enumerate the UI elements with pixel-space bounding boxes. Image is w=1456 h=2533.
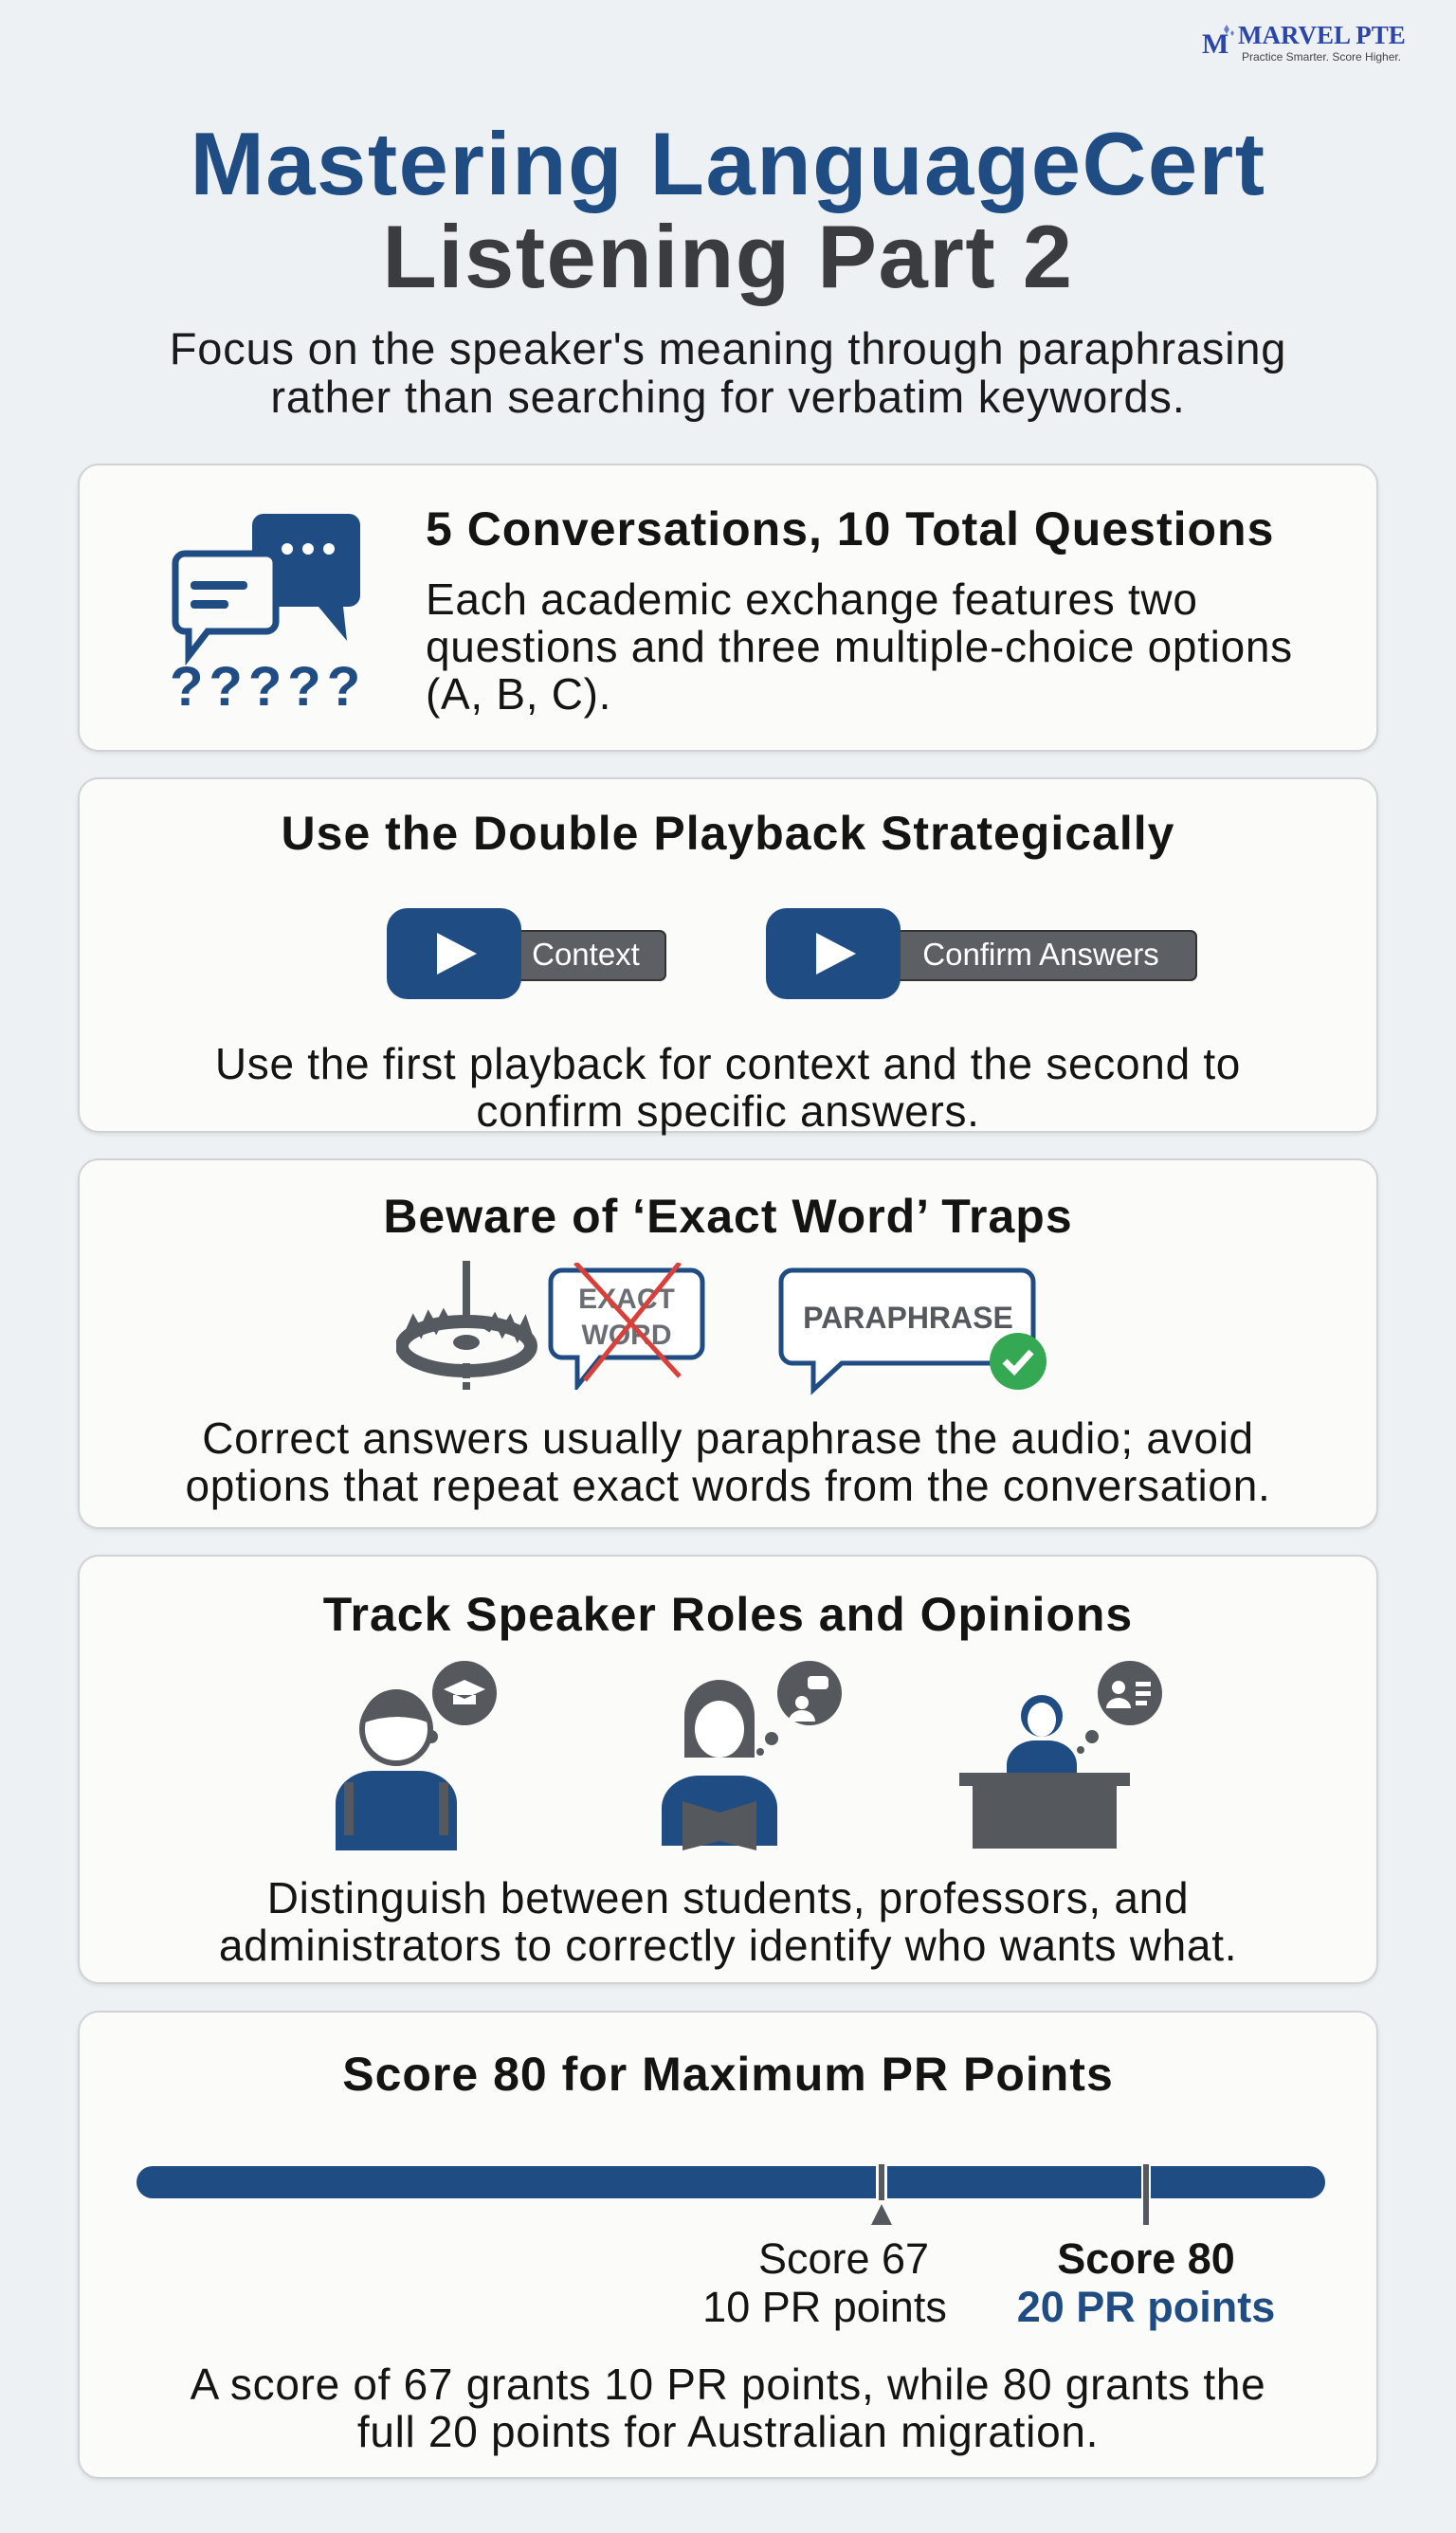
subtitle: Focus on the speaker's meaning through paraphrasing [170,323,1286,374]
panel: score 80 [78,2011,1378,2479]
icon: bear trap [396,1261,537,1390]
icon: paraphrase bubble: PARAPHRASE [803,1301,1013,1335]
icon: exact word crossed: WORD [582,1320,671,1351]
title [190,114,1266,306]
text block: questions and three multiple-choice options [426,622,1293,671]
text block [219,1873,1237,1970]
label: score 67: Score 67 [758,2234,929,2283]
heading: Beware of ‘Exact Word’ Traps [383,1190,1073,1243]
icon: paraphrase bubble [779,1268,1046,1395]
icon: exact word crossed: EXACT [578,1284,675,1315]
label: score 67 [702,2234,947,2331]
heading: 5 Conversations, 10 Total Questions [426,502,1274,556]
text block [215,1039,1241,1136]
icon: chat bubbles [170,514,366,715]
icon: student [336,1661,497,1850]
logo: MARVEL PTE [1238,21,1406,49]
text block: A score of 67 grants 10 PR points, while 80 grants the [191,2360,1265,2409]
text block: Use the first playback for context and the second to [215,1039,1241,1088]
heading: Use the Double Playback Strategically [282,807,1174,860]
icon: play confirm: Confirm Answers [922,937,1159,972]
icon: professor [662,1661,842,1850]
text block: Each academic exchange features two [426,574,1198,624]
icon: play context [387,908,666,999]
heading: Track Speaker Roles and Opinions [323,1588,1133,1641]
bar chart [136,2164,1325,2225]
text block [186,1413,1270,1510]
subtitle: rather than searching for verbatim keywords. [270,372,1186,422]
panel: exact word traps [78,1158,1378,1529]
panel: speaker roles [78,1555,1378,1984]
icon: play confirm [766,908,1197,999]
text block: Correct answers usually paraphrase the audio; avoid [202,1413,1254,1463]
title: Listening Part 2 [382,207,1074,306]
icon: play context: Context [532,937,640,972]
text block: administrators to correctly identify who wants what. [219,1921,1237,1970]
label: score 80: Score 80 [1057,2234,1235,2283]
icon: exact word crossed [548,1263,705,1390]
text block [426,574,1293,719]
text block: Distinguish between students, professors, and [267,1873,1189,1923]
text block [190,2360,1265,2456]
text block: options that repeat exact words from the conversation. [186,1461,1270,1510]
heading: Score 80 for Maximum PR Points [342,2048,1114,2101]
title: Mastering LanguageCert [190,114,1266,213]
subtitle [170,323,1286,422]
icon: administrator [959,1661,1162,1849]
logo: Practice Smarter. Score Higher. [1242,50,1401,64]
label: score 67: 10 PR points [702,2283,947,2331]
text block: confirm specific answers. [476,1086,980,1136]
panel: conversations [78,464,1378,752]
panel: double playback [78,777,1378,1133]
logo [1202,21,1406,64]
text block: (A, B, C). [426,669,611,719]
label: score 80 [1017,2234,1275,2331]
text block: full 20 points for Australian migration. [357,2407,1099,2456]
label: score 80: 20 PR points [1017,2283,1275,2331]
